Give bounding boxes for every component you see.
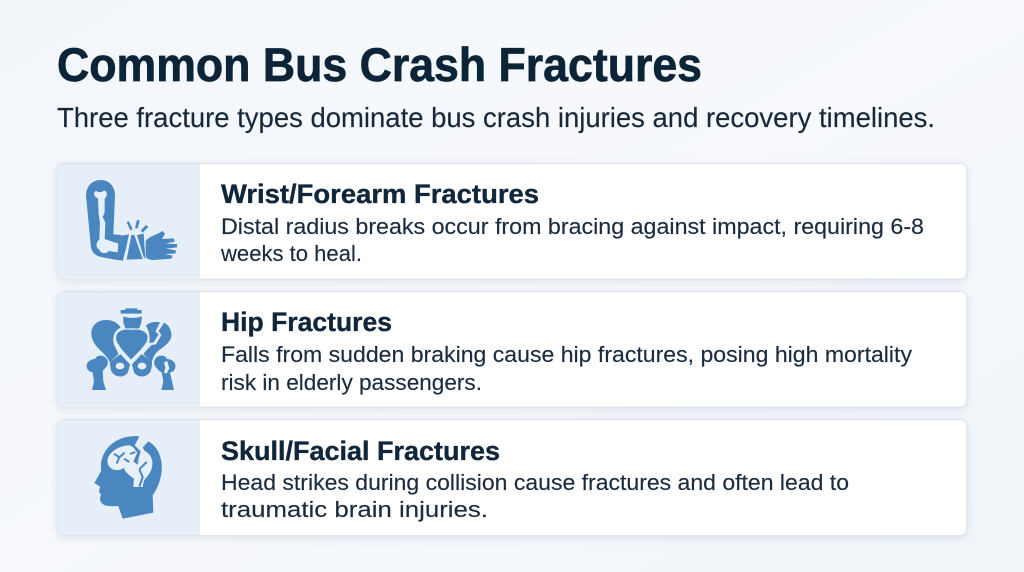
heading: Wrist/Forearm Fractures — [221, 179, 539, 209]
subtitle: Three fracture types dominate bus crash injuries and recovery timelines. — [57, 102, 935, 133]
icon: broken arm and wrist — [86, 180, 177, 261]
description: Falls from sudden braking cause hip fractures, posing high mortality — [221, 342, 912, 367]
heading: Skull/Facial Fractures — [221, 436, 500, 466]
description: Distal radius breaks occur from bracing against impact, requiring 6-8 — [221, 214, 924, 239]
icon: head with brain and crack — [94, 436, 162, 519]
heading: Hip Fractures — [221, 307, 392, 337]
panel: skull/facial fractures — [58, 420, 966, 536]
panel: hip fractures — [58, 292, 966, 407]
panel: wrist/forearm fractures — [58, 164, 966, 279]
description — [221, 342, 912, 395]
description: Head strikes during collision cause fractures and often lead to — [221, 470, 849, 495]
icon: pelvis with fracture — [87, 308, 175, 390]
description: risk in elderly passengers. — [221, 370, 482, 395]
description: traumatic brain injuries. — [221, 497, 488, 522]
description: weeks to heal. — [220, 241, 362, 266]
description — [220, 214, 924, 266]
title: Common Bus Crash Fractures — [57, 38, 702, 91]
description — [221, 470, 849, 522]
